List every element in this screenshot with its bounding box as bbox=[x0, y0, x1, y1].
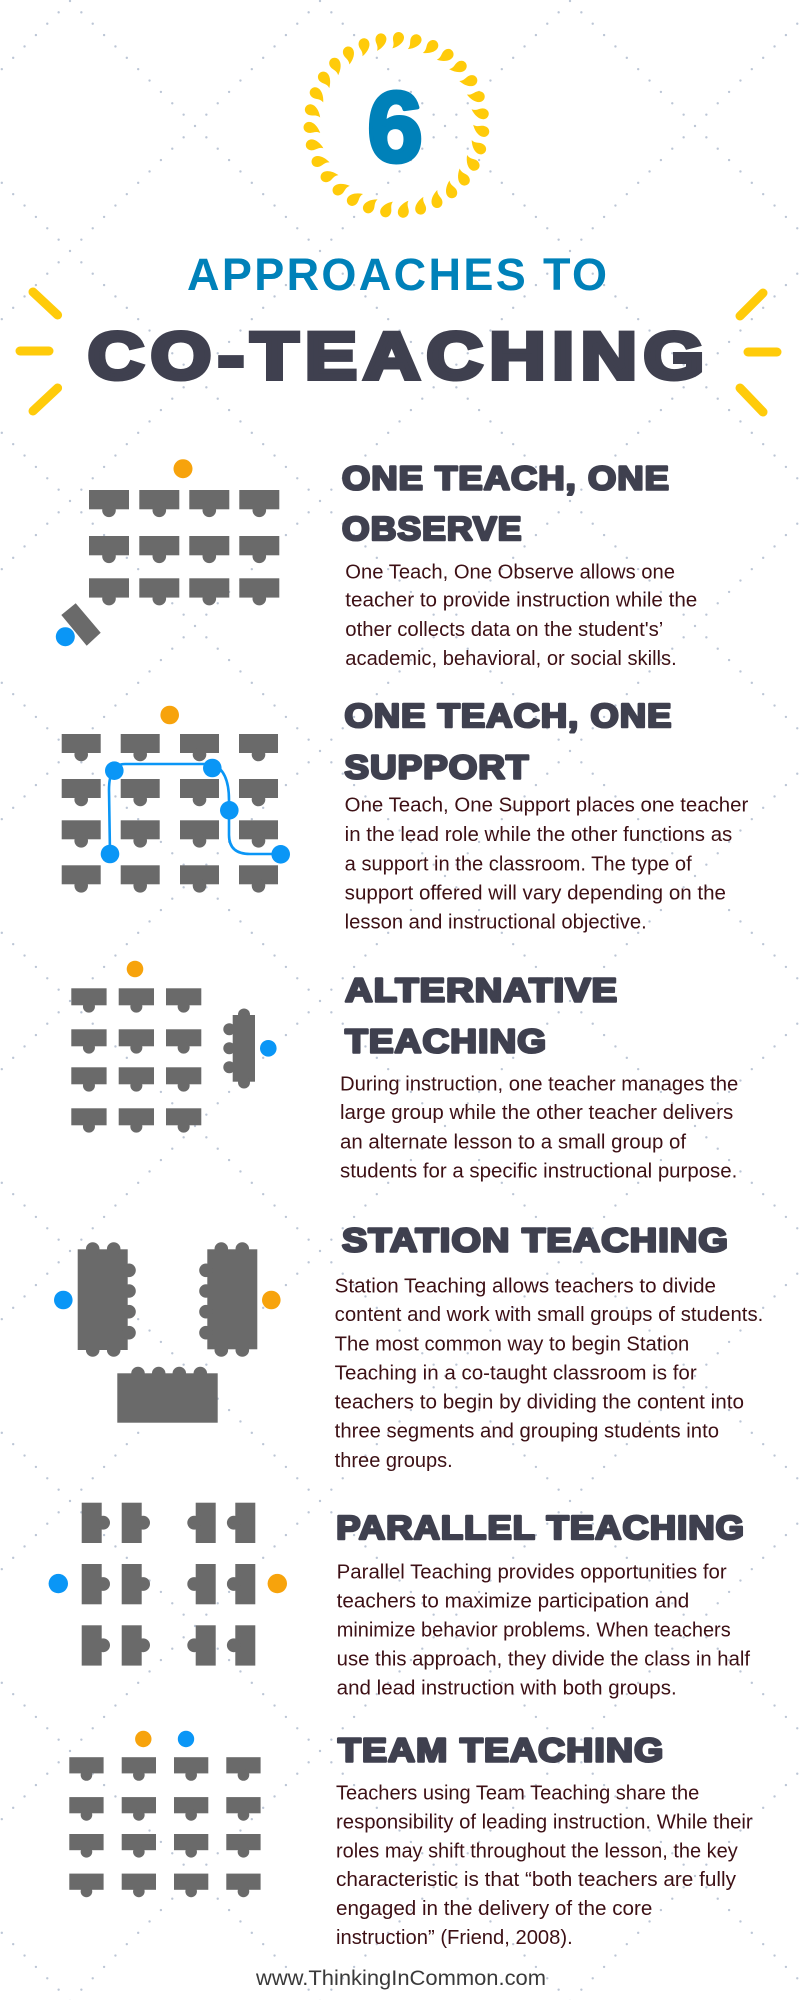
classroom diagram: alternative bbox=[71, 988, 255, 1133]
teacher dot: orange bbox=[268, 1574, 287, 1593]
text: team description bbox=[336, 1782, 753, 1949]
heading: one teach, one support bbox=[344, 697, 672, 786]
lead teacher dot bbox=[174, 459, 192, 478]
teacher dot: blue bbox=[54, 1291, 73, 1309]
text: parallel description: and lead instruction with both groups. bbox=[337, 1677, 677, 1699]
text: one observe description: One Teach, One Observe allows one bbox=[345, 561, 675, 583]
panel: one teach, one observe bbox=[56, 459, 697, 670]
heading: station teaching: STATION TEACHING bbox=[342, 1221, 729, 1258]
classroom diagram: one support bbox=[62, 734, 278, 893]
panel: parallel teaching bbox=[49, 1503, 750, 1699]
text: team description: roles may shift throughout the lesson, the key bbox=[336, 1840, 738, 1862]
observing teacher dot bbox=[56, 627, 75, 646]
classroom diagram: two halves bbox=[82, 1503, 255, 1666]
heading: one teach, one observe: OBSERVE bbox=[342, 510, 522, 547]
text: station description: three groups. bbox=[335, 1450, 453, 1472]
text: station description: content and work with small groups of students. bbox=[335, 1304, 763, 1326]
text: station description: teachers to begin by dividing the content into bbox=[335, 1391, 744, 1413]
icon: left sunburst bbox=[20, 292, 58, 411]
lead teacher dot bbox=[160, 706, 179, 724]
text: station description: three segments and grouping students into bbox=[335, 1421, 719, 1443]
text: one observe description bbox=[345, 561, 697, 670]
text: station description: Station Teaching allows teachers to divide bbox=[335, 1275, 716, 1297]
text: team description: characteristic is that “both teachers are fully bbox=[336, 1869, 736, 1891]
text: parallel description: minimize behavior problems. When teachers bbox=[337, 1620, 731, 1642]
text: one observe description: teacher to provide instruction while the bbox=[345, 590, 697, 612]
text: alternative description: students for a specific instructional purpose. bbox=[340, 1161, 737, 1183]
heading: parallel teaching: PARALLEL TEACHING bbox=[336, 1509, 745, 1546]
teacher dot: orange bbox=[262, 1291, 281, 1309]
text: one observe description: other collects data on the student's’ bbox=[345, 619, 663, 641]
text: station description bbox=[335, 1275, 763, 1472]
text: station description: Teaching in a co-taught classroom is for bbox=[335, 1363, 697, 1385]
support teacher path bbox=[109, 764, 281, 854]
heading: alternative teaching bbox=[345, 972, 618, 1059]
teacher dot: blue bbox=[49, 1574, 68, 1593]
heading: team teaching: TEAM TEACHING bbox=[338, 1731, 664, 1768]
heading: alternative teaching: ALTERNATIVE bbox=[345, 972, 618, 1009]
heading: one teach, one observe bbox=[342, 459, 670, 547]
text: team description: Teachers using Team Teaching share the bbox=[336, 1782, 699, 1804]
text: parallel description: use this approach, they divide the class in half bbox=[337, 1649, 750, 1671]
lead teacher dot bbox=[127, 961, 143, 977]
text: one support description bbox=[345, 795, 749, 933]
text: one support description: in the lead role while the other functions as bbox=[345, 824, 732, 846]
text: alternative description: During instruction, one teacher manages the bbox=[340, 1074, 738, 1096]
heading: alternative teaching: TEACHING bbox=[345, 1022, 547, 1059]
text: parallel description: Parallel Teaching provides opportunities for bbox=[337, 1561, 727, 1583]
panel: station teaching bbox=[54, 1221, 763, 1472]
heading: one teach, one support: SUPPORT bbox=[344, 749, 530, 786]
title: co-teaching: CO-TEACHING bbox=[88, 318, 711, 392]
text: alternative description: large group while the other teacher delivers bbox=[340, 1102, 733, 1124]
text: alternative description: an alternate lesson to a small group of bbox=[340, 1131, 686, 1153]
text: one support description: support offered will vary depending on the bbox=[345, 882, 726, 904]
classroom diagram: team bbox=[69, 1757, 261, 1897]
text: alternative description bbox=[340, 1074, 738, 1183]
text: parallel description: teachers to maximize participation and bbox=[337, 1591, 689, 1613]
footer: website: www.ThinkingInCommon.com bbox=[255, 1966, 546, 1990]
text: one support description: lesson and instructional objective. bbox=[345, 911, 647, 933]
support teacher stops bbox=[101, 759, 290, 864]
text: one support description: One Teach, One Support places one teacher bbox=[345, 795, 749, 817]
text: parallel description bbox=[337, 1561, 750, 1699]
numeral 6: 6 bbox=[367, 72, 423, 184]
icon: yellow ring of drops bbox=[303, 32, 490, 218]
heading: one teach, one support: ONE TEACH, ONE bbox=[344, 697, 672, 734]
small group teacher dot bbox=[260, 1040, 277, 1057]
classroom diagram: three stations bbox=[78, 1242, 257, 1423]
text: station description: The most common way to begin Station bbox=[335, 1334, 689, 1356]
teacher dot: blue bbox=[178, 1731, 194, 1747]
panel: alternative teaching bbox=[71, 961, 738, 1183]
heading: one teach, one observe: ONE TEACH, ONE bbox=[342, 459, 670, 496]
classroom diagram: one observe bbox=[61, 490, 279, 646]
panel: team teaching bbox=[69, 1731, 753, 1949]
text: team description: responsibility of leading instruction. While their bbox=[336, 1811, 753, 1833]
text: team description: engaged in the delivery of the core bbox=[336, 1898, 652, 1920]
teacher dot: orange bbox=[135, 1731, 152, 1747]
icon: right sunburst bbox=[740, 293, 777, 412]
heading: approaches to: APPROACHES TO bbox=[187, 249, 607, 300]
panel: one teach, one support bbox=[62, 697, 749, 933]
text: one support description: a support in the classroom. The type of bbox=[345, 854, 692, 876]
text: team description: instruction” (Friend, 2008). bbox=[336, 1927, 573, 1949]
text: one observe description: academic, behavioral, or social skills. bbox=[345, 648, 677, 670]
